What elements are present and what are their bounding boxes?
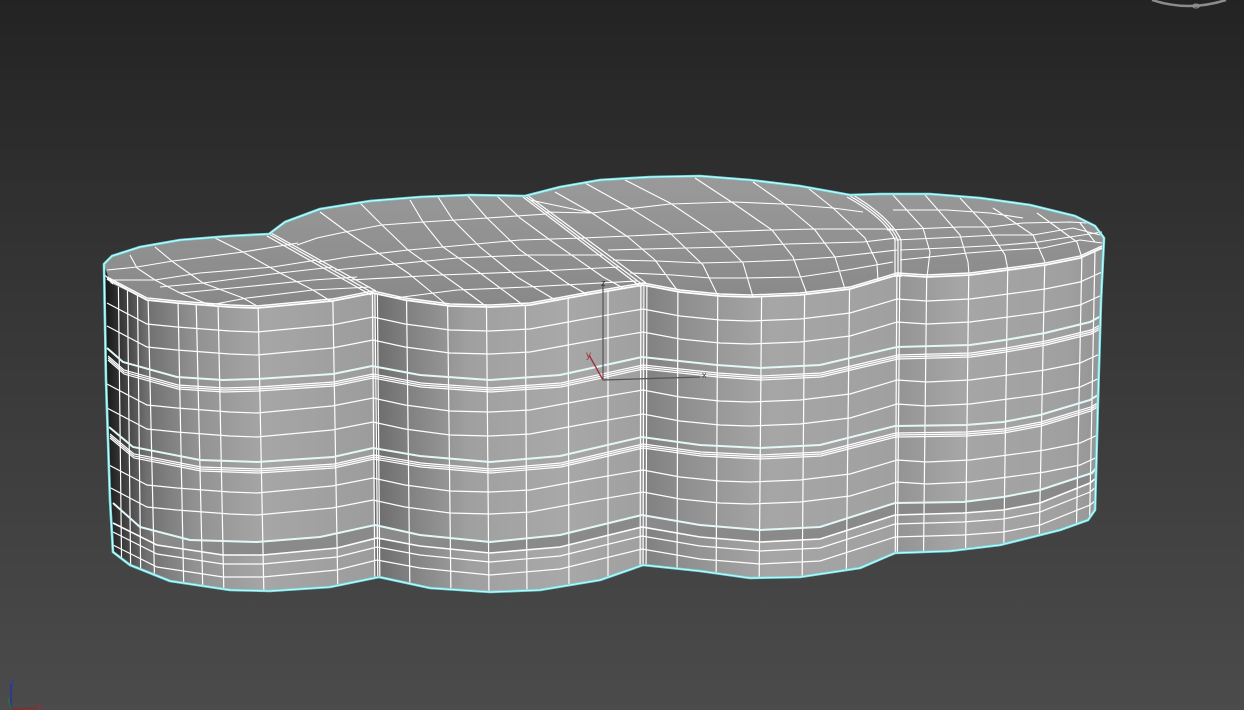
top edge double line [107,246,1102,308]
pivot axis gizmo [586,278,707,380]
side wireframe rings and columns [107,250,1102,600]
selection outline [104,176,1104,592]
vertical columns [118,250,1095,600]
pivot axis gizmo: y [586,350,591,361]
world axis indicator [8,677,42,710]
pivot axis gizmo: x [702,370,707,380]
lobe 2 grid [297,195,637,307]
top face wireframe [105,178,1102,308]
pivot axis gizmo: z [601,278,606,288]
view cube compass arc [1152,0,1226,8]
lobe seams [267,195,901,295]
horizontal loops [107,272,1102,577]
body side shading [106,246,1102,591]
main ring lines [107,316,1101,542]
lobe 4 grid [887,195,1102,277]
cloud model body [100,176,1108,600]
top face [104,176,1104,308]
lobe 3 grid [530,178,897,297]
lobe 1 grid [105,238,370,306]
world axis indicator: z [10,677,15,687]
